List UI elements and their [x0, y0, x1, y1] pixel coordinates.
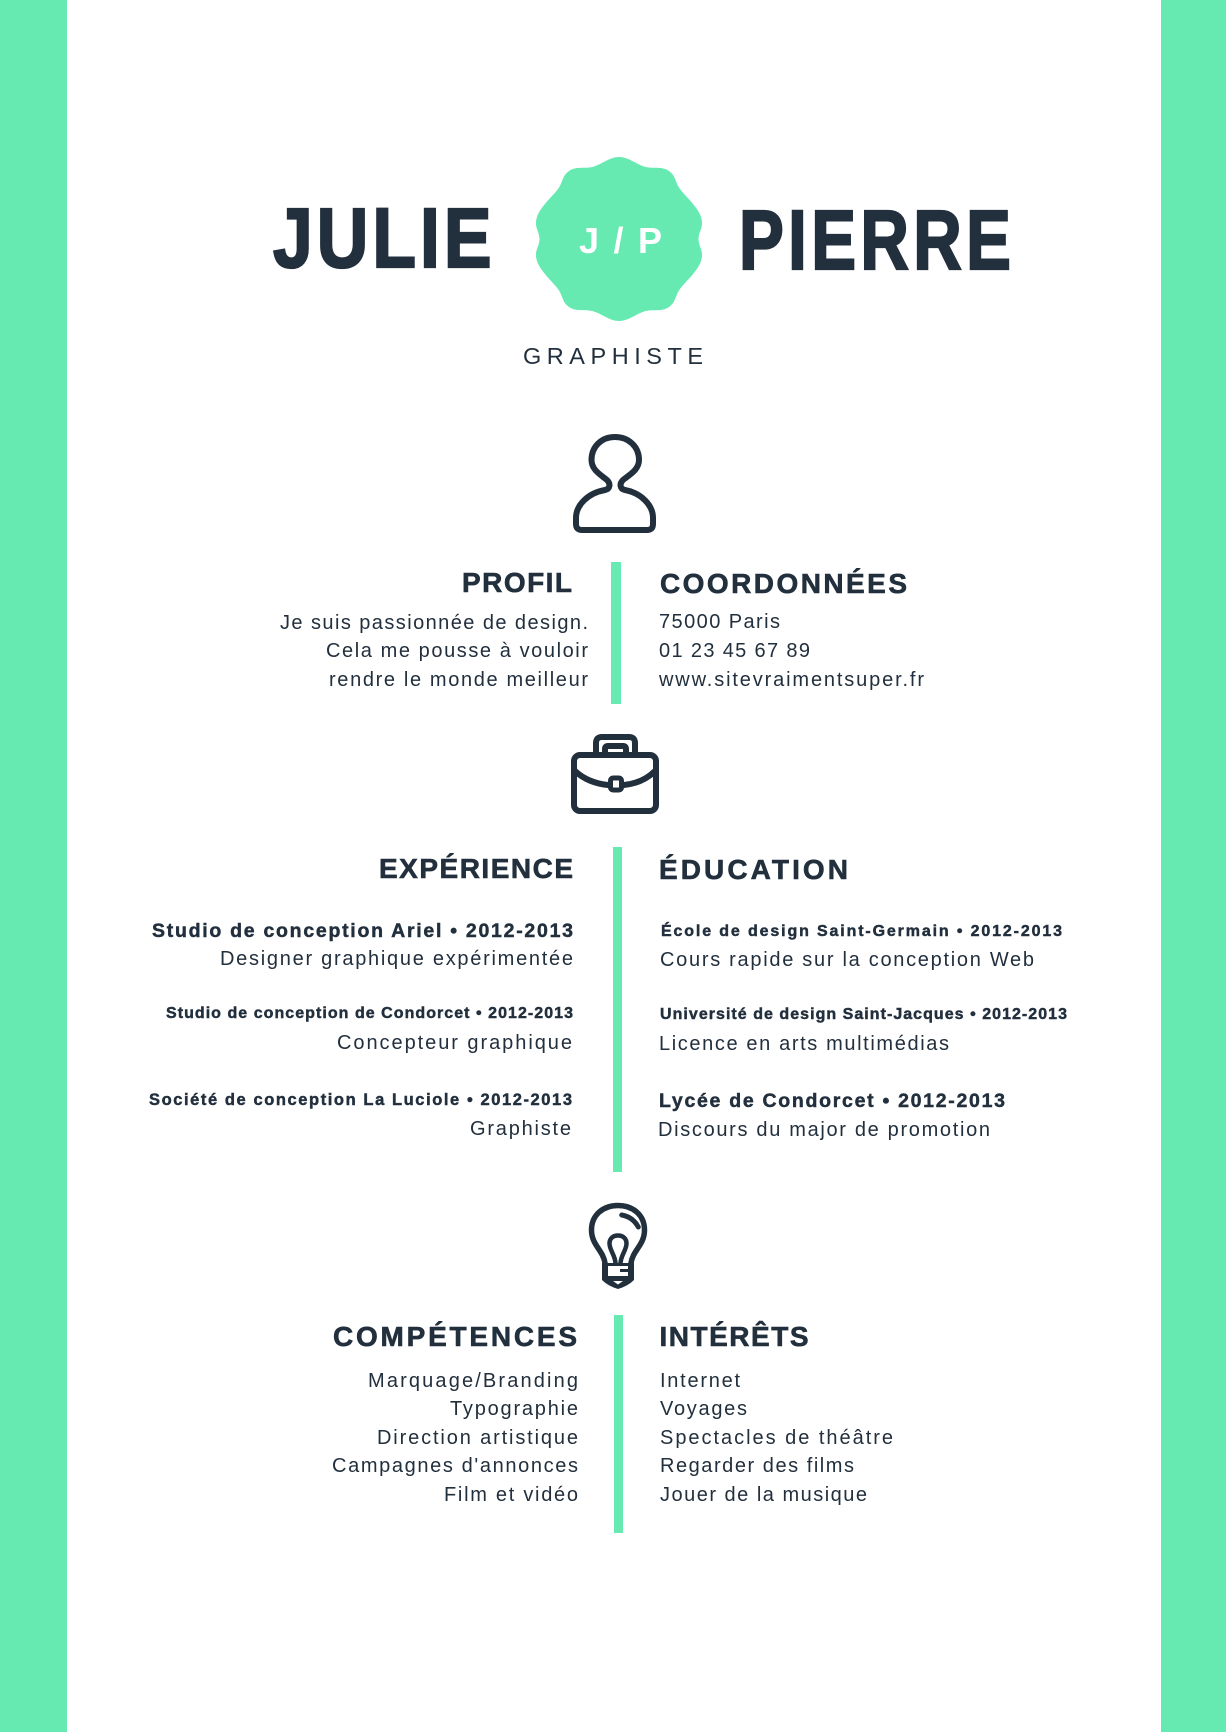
contact details — [658, 611, 924, 691]
interests list: Regarder des films — [660, 1455, 854, 1477]
interests list: Internet — [660, 1370, 740, 1392]
skills list: Marquage/Branding — [368, 1370, 578, 1392]
profil text: Cela me pousse à vouloir — [326, 640, 588, 662]
divider bar — [611, 562, 621, 704]
badge initials: J / P — [579, 220, 662, 261]
header — [273, 157, 1011, 369]
experience entries: Concepteur graphique — [337, 1032, 572, 1054]
contact details: www.sitevraimentsuper.fr — [658, 669, 924, 691]
experience entries — [149, 920, 573, 1140]
experience entries: Designer graphique expérimentée — [220, 948, 573, 970]
interests list: Jouer de la musique — [660, 1484, 867, 1506]
heading: profil: PROFIL — [462, 567, 572, 598]
interests list: Voyages — [660, 1398, 747, 1420]
experience entries: Société de conception La Luciole • 2012-2013 — [149, 1091, 572, 1109]
education entries: École de design Saint-Germain • 2012-2013 — [661, 921, 1062, 940]
icon: light bulb — [592, 1206, 644, 1289]
badge shape — [536, 157, 702, 321]
contact details: 75000 Paris — [659, 611, 780, 633]
monogram badge — [536, 157, 702, 321]
title: first name: JULIE — [273, 190, 491, 285]
panel: competences and interets — [332, 1315, 893, 1533]
education entries: Discours du major de promotion — [658, 1119, 990, 1141]
profil text: Je suis passionnée de design. — [280, 612, 588, 634]
icon: briefcase — [574, 737, 656, 811]
experience entries: Studio de conception de Condorcet • 2012-2013 — [166, 1005, 573, 1022]
heading: experience: EXPÉRIENCE — [379, 853, 573, 884]
heading: coordonnees: COORDONNÉES — [660, 568, 907, 599]
heading: competences: COMPÉTENCES — [333, 1321, 577, 1352]
education entries: Cours rapide sur la conception Web — [660, 949, 1034, 971]
education entries: Université de design Saint-Jacques • 2012-2013 — [660, 1006, 1067, 1023]
heading: education: ÉDUCATION — [659, 854, 848, 885]
education entries: Lycée de Condorcet • 2012-2013 — [659, 1090, 1005, 1112]
panel: experience and education — [149, 847, 1067, 1172]
skills list — [332, 1370, 578, 1506]
profil text — [280, 612, 588, 691]
interests list — [660, 1370, 893, 1506]
job title: GRAPHISTE — [523, 343, 703, 369]
title: last name: PIERRE — [739, 194, 1011, 288]
icon: person — [576, 437, 653, 530]
experience entries: Graphiste — [470, 1118, 571, 1140]
panel: profil and coordonnees — [280, 562, 924, 704]
heading: interets: INTÉRÊTS — [660, 1321, 808, 1352]
skills list: Film et vidéo — [444, 1484, 578, 1506]
left side band — [0, 0, 67, 1732]
profil text: rendre le monde meilleur — [329, 669, 588, 691]
right side band — [1161, 0, 1226, 1732]
divider bar — [614, 1315, 623, 1533]
divider bar — [613, 847, 622, 1172]
skills list: Campagnes d'annonces — [332, 1455, 578, 1477]
contact details: 01 23 45 67 89 — [659, 640, 810, 662]
interests list: Spectacles de théâtre — [660, 1427, 893, 1449]
education entries — [658, 921, 1067, 1141]
education entries: Licence en arts multimédias — [659, 1033, 949, 1055]
skills list: Typographie — [450, 1398, 578, 1420]
experience entries: Studio de conception Ariel • 2012-2013 — [152, 920, 573, 942]
skills list: Direction artistique — [377, 1427, 578, 1449]
